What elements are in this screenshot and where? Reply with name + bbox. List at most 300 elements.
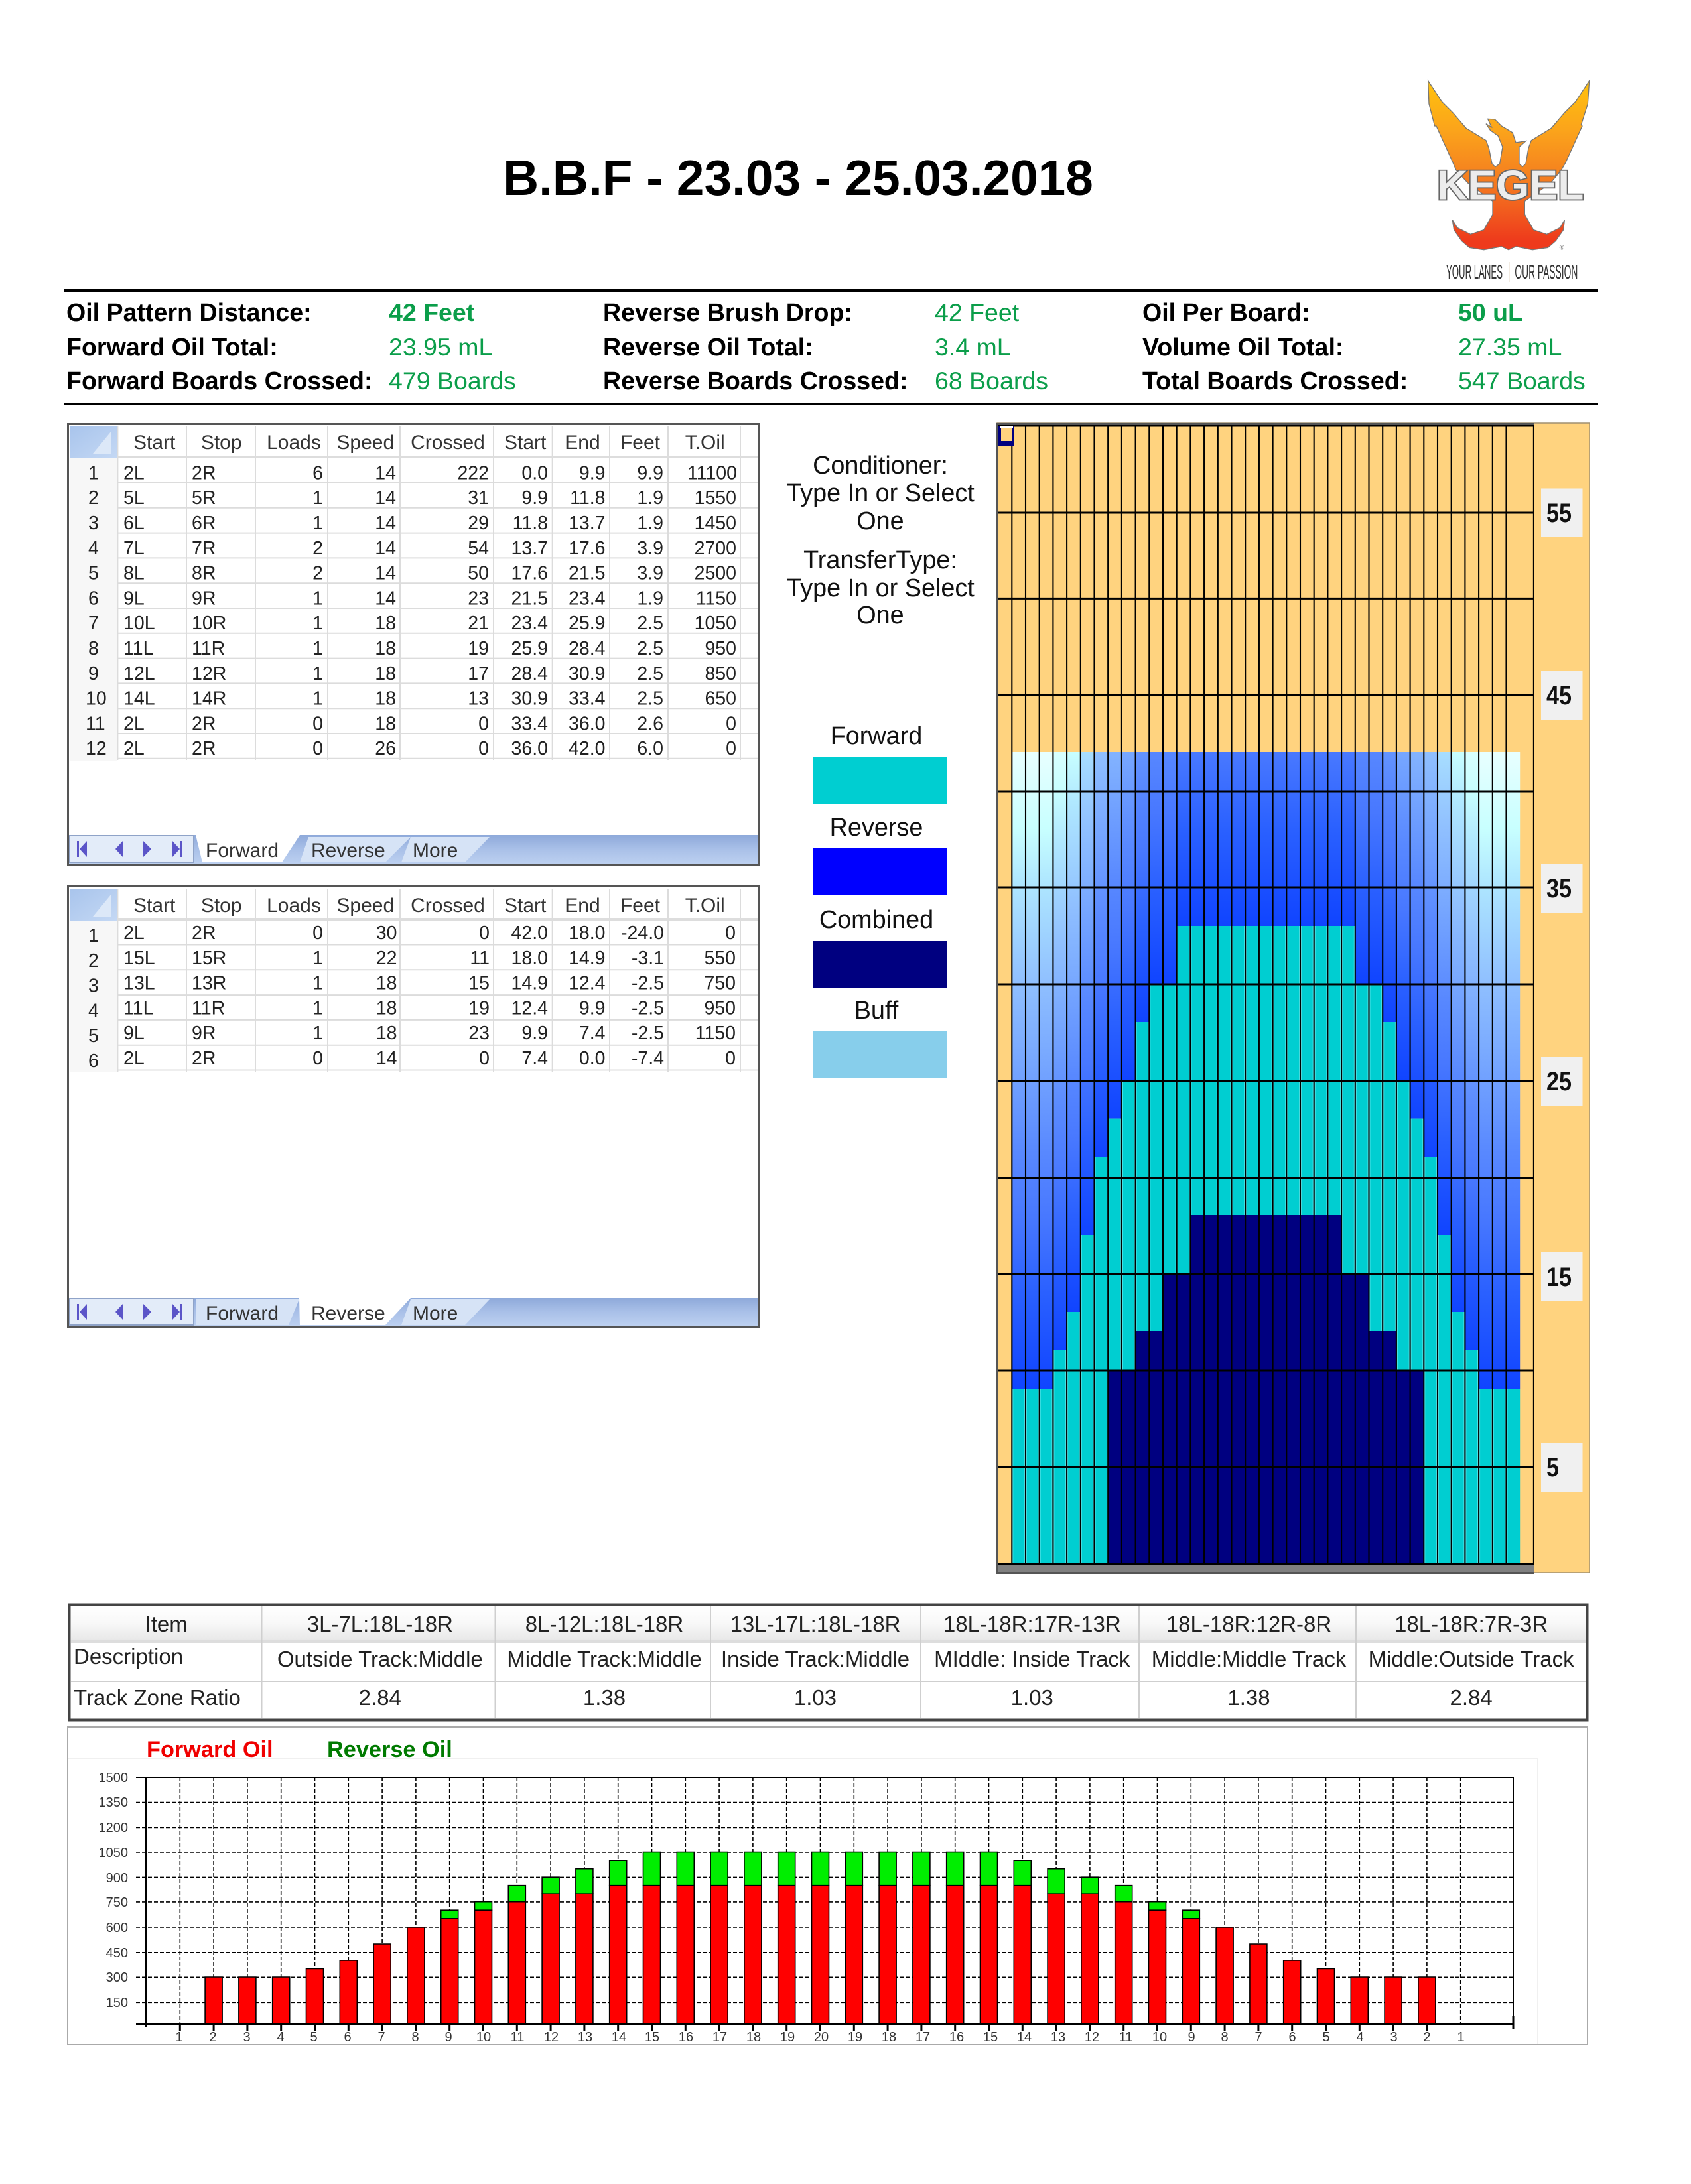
table data rows: 1 [312,588,323,609]
table data rows: 30.9 [569,663,605,684]
table data rows: 7 [88,613,99,634]
table row: description: Description [74,1644,183,1669]
table data rows: 18 [376,973,397,994]
table data rows [86,462,737,759]
table data rows: 2R [192,738,216,759]
chart axes [136,1777,1514,2031]
table data rows: 2500 [695,563,736,584]
legend item: reverse: Reverse [830,814,923,842]
table data rows: 222 [457,462,489,483]
table data rows: 50 [468,563,489,584]
distance label 45: 45 [1546,681,1572,710]
column: forward stats: Oil Pattern Distance: [66,298,312,326]
table data rows: 7.4 [521,1048,548,1069]
table data rows: 13R [192,973,226,994]
table data rows: 13 [468,688,489,710]
chart y axis labels: 1500 [98,1771,128,1785]
table data rows: 2R [192,923,216,944]
table data rows: 9R [192,1023,216,1044]
table data rows: 1 [88,925,99,946]
legend item: buff: Buff [854,997,899,1025]
table row: track zone ratio [74,1685,1493,1710]
summary rule top [64,289,1598,292]
column: total stats: Oil Per Board: [1142,298,1310,326]
sheet tab bar: Reverse [311,1303,385,1324]
table row: description: Middle:Middle Track [1152,1647,1347,1671]
table data rows: 21 [468,613,489,634]
table data rows: 1550 [695,487,736,509]
table data rows: 0.0 [521,462,548,483]
column: forward stats: 23.95 mL [389,333,492,361]
table data rows: 22 [376,948,397,969]
table data rows: 1 [88,462,99,483]
chart x axis labels: 13 [1051,2030,1065,2045]
column: forward stats: 42 Feet [389,298,475,326]
distance labels [1541,488,1583,1492]
column: total stats: Volume Oil Total: [1142,333,1343,361]
table data rows: 0 [478,738,489,759]
table data rows: 1.9 [637,513,663,534]
chart x axis labels: 2 [209,2030,217,2045]
column: reverse stats: Reverse Brush Drop: [603,298,852,326]
table data rows: 2 [312,538,323,559]
column: forward stats: 479 Boards [389,367,516,395]
table data rows: 13.7 [511,538,548,559]
table data rows: 23 [468,588,489,609]
chart x axis labels: 7 [377,2030,385,2045]
table data rows: 1 [312,688,323,710]
text: transfer type selection [786,546,975,629]
text: transfer type selection: TransferType: [803,546,957,574]
table data rows: 0 [312,1048,323,1069]
table row: item: 18L-18R:7R-3R [1394,1612,1548,1636]
table data rows: 1 [312,513,323,534]
table header row: End [565,432,600,454]
table data rows: 12.4 [569,973,606,994]
table data rows: 18 [376,997,397,1019]
table data rows: 650 [705,688,736,710]
table header row: Start [133,432,176,454]
table data rows: 2R [192,462,216,483]
table row: item: 18L-18R:12R-8R [1166,1612,1331,1636]
table row: description: MIddle: Inside Track [934,1647,1130,1671]
table data rows: 2.5 [637,688,663,710]
table row: item: 3L-7L:18L-18R [307,1612,453,1636]
table header row: T.Oil [685,432,725,454]
chart x axis labels: 16 [679,2030,693,2045]
table data rows: 9.9 [521,1023,548,1044]
chart y axis labels: 300 [106,1970,128,1985]
table data rows: 17.6 [511,563,548,584]
chart x axis labels: 14 [1017,2030,1032,2045]
forward oil area [1012,926,1521,1563]
table data rows: 6L [123,513,145,534]
table data rows: 0 [725,923,736,944]
table header row: Crossed [411,432,485,454]
distance label 55: 55 [1546,499,1572,528]
table data rows: 26 [375,738,396,759]
table row: item: 13L-17L:18L-18R [730,1612,900,1636]
table data rows: 14.9 [569,948,605,969]
table data rows: 14 [376,1048,397,1069]
legend item: combined [813,906,947,988]
table data rows: 42.0 [569,738,605,759]
table row: item [145,1612,1548,1636]
panel: reverse load table [68,886,759,1326]
logo registered mark: ® [1560,245,1565,252]
table data rows: 14 [375,487,396,509]
table data rows: 7L [123,538,145,559]
column: reverse stats: 42 Feet [935,298,1020,326]
chart x axis labels [175,2030,1465,2045]
table data rows: 33.4 [511,713,548,734]
chart x axis labels: 6 [344,2030,352,2045]
legend item: combined: Combined [819,906,933,934]
chart x axis labels: 17 [712,2030,727,2045]
table data rows: 36.0 [511,738,548,759]
table data rows: 21.5 [569,563,605,584]
table data rows: 11.8 [570,487,605,509]
table row: description: Middle Track:Middle [507,1647,702,1671]
table data rows: -3.1 [632,948,664,969]
table header row: Loads [267,432,321,454]
lane bottom edge [998,1563,1534,1573]
table data rows: 6 [88,1051,99,1072]
table header row [133,432,725,454]
chart x axis labels: 19 [848,2030,862,2045]
table data rows: 0 [726,713,736,734]
distance label 5 [1541,1443,1583,1492]
table data rows: 0 [312,923,323,944]
table data rows: 33.4 [569,688,606,710]
table data rows: 18 [375,613,396,634]
table data rows: 1.9 [637,588,663,609]
table data rows: 11R [192,997,225,1019]
table data rows: 14 [375,588,396,609]
title: B.B.F - 23.03 - 25.03.2018 [503,150,1093,206]
table row: description: Outside Track:Middle [277,1647,483,1671]
table data rows: 18 [375,713,396,734]
table data rows: 11.8 [513,513,548,534]
chart x axis labels: 11 [1119,2030,1132,2045]
legend item: buff [813,997,947,1078]
panel: lane oil graph [997,423,1590,1573]
table data rows: 23.4 [511,613,548,634]
legend: oil colours [813,722,947,1078]
table data rows: 5 [88,1025,99,1047]
table header row: Start [504,895,547,917]
table header row: T.Oil [685,895,725,917]
table header row: Stop [201,895,242,917]
table row: track zone ratio: Track Zone Ratio [74,1685,241,1710]
table data rows: 9.9 [579,997,605,1019]
chart x axis labels: 9 [444,2030,452,2045]
table data rows: 4 [88,1000,99,1021]
legend item: reverse [813,814,947,895]
table data rows: 10L [123,613,155,634]
chart legend: reverse oil: Reverse Oil [327,1737,452,1762]
chart y axis labels: 150 [106,1996,128,2010]
table data rows: 21.5 [511,588,548,609]
table data rows: 1150 [695,1023,736,1044]
table data rows: 12L [123,663,155,684]
table header row: Stop [201,432,242,454]
logo: Kegel phoenix: OUR PASSION [1515,261,1578,283]
table data rows: 2L [123,1048,145,1069]
column: forward stats: Forward Oil Total: [66,333,278,361]
table row: item: 18L-18R:17R-13R [943,1612,1121,1636]
table header row: Start [133,895,176,917]
table data rows: 2 [312,563,323,584]
table data rows: 9.9 [521,487,548,509]
table header row: End [565,895,600,917]
table header row: Feet [620,895,661,917]
table data rows: 9L [123,1023,145,1044]
chart x axis labels: 2 [1423,2030,1431,2045]
table data rows: 4 [88,538,99,559]
table data rows: 750 [704,973,736,994]
chart x axis labels: 3 [243,2030,251,2045]
table row: description: Middle:Outside Track [1369,1647,1574,1671]
table data rows: 15R [192,948,226,969]
table row: track zone ratio: 1.38 [1227,1685,1270,1710]
chart x axis labels: 6 [1288,2030,1296,2045]
table data rows: 17 [468,663,489,684]
table data rows: -2.5 [632,997,664,1019]
table data rows: 18 [375,638,396,659]
text: conditioner selection: Type In or Select [786,480,975,507]
table data rows: 18 [375,688,396,710]
table data rows: 28.4 [511,663,548,684]
chart x axis labels: 5 [1322,2030,1330,2045]
table data rows: 2L [123,462,145,483]
table data rows: 0.0 [579,1048,605,1069]
chart x axis labels: 12 [544,2030,559,2045]
table data rows: 25.9 [511,638,548,659]
chart x axis labels: 18 [746,2030,761,2045]
text: conditioner selection [786,452,975,535]
table data rows: 6 [88,588,99,609]
table data rows: 0 [312,738,323,759]
table data rows: 14 [375,462,396,483]
table data rows: -7.4 [632,1048,664,1069]
chart y axis labels: 1050 [98,1846,128,1860]
distance label 35: 35 [1546,874,1572,903]
table data rows: 12R [192,663,226,684]
column: reverse stats: 3.4 mL [935,333,1011,361]
table data rows: 6.0 [637,738,663,759]
table row: item: Item [145,1612,188,1636]
chart bars: reverse oil [441,1852,1199,1919]
sheet tab bar: Forward [206,840,279,862]
table data rows: 2R [192,1048,216,1069]
table data rows: 7.4 [579,1023,606,1044]
table data rows: 950 [705,638,736,659]
summary statistics [66,298,1586,395]
panel: forward load table [68,424,759,865]
chart x axis labels: 4 [1356,2030,1364,2045]
chart x axis labels: 17 [915,2030,930,2045]
sheet tab bar [69,1298,758,1326]
chart x axis labels: 7 [1254,2030,1262,2045]
chart x axis labels: 12 [1085,2030,1099,2045]
distance label 25: 25 [1546,1067,1572,1096]
table data rows: 1 [312,997,323,1019]
column: reverse stats: Reverse Boards Crossed: [603,367,908,395]
sheet tab bar: More [413,840,458,862]
chart y axis labels [98,1771,128,2010]
column: total stats: 547 Boards [1458,367,1586,395]
table header row [133,895,725,917]
oil ramp: reverse and buffed oil columns [1012,752,1520,1389]
chart x axis labels: 3 [1390,2030,1398,2045]
table data rows: 54 [468,538,489,559]
chart y axis labels: 1200 [98,1821,128,1835]
column: total stats: Total Boards Crossed: [1142,367,1408,395]
table data rows: 18.0 [511,948,548,969]
chart x axis labels: 8 [1221,2030,1229,2045]
distance label 25 [1541,1057,1583,1106]
table data rows: 11 [86,713,105,734]
table data rows: 12.4 [511,997,548,1019]
table data rows: 0 [725,1048,736,1069]
table data rows: 12 [86,738,107,759]
table data rows: 5R [192,487,216,509]
table data rows: 5 [88,563,99,584]
table corner cell [70,889,117,921]
table data rows: 2L [123,923,145,944]
chart x axis labels: 14 [612,2030,626,2045]
distance label 45 [1541,671,1583,720]
distance label 5: 5 [1546,1453,1559,1482]
table data rows: 2R [192,713,216,734]
chart y axis labels: 750 [106,1895,128,1910]
chart bars: forward oil [205,1886,1436,2024]
legend item: forward [813,722,947,804]
table data rows: 2 [88,487,99,509]
table data rows [88,923,736,1072]
table data rows: 10 [86,688,107,710]
table data rows: 850 [705,663,736,684]
table data rows: 11100 [687,462,737,483]
table data rows: 3 [88,976,99,997]
table data rows: 2700 [695,538,736,559]
table data rows: 2L [123,713,145,734]
chart x axis labels: 11 [511,2030,524,2045]
table data rows: 9 [88,663,99,684]
table data rows: 1.9 [637,487,663,509]
table data rows: 13L [123,973,155,994]
chart y axis labels: 450 [106,1946,128,1960]
table data rows: 36.0 [569,713,605,734]
table data rows: 6R [192,513,216,534]
table data rows: 19 [468,638,489,659]
chart y axis labels: 600 [106,1921,128,1935]
chart x axis labels: 20 [814,2030,829,2045]
column: total stats [1142,298,1586,395]
table header row: Crossed [411,895,485,917]
table data rows: 25.9 [569,613,605,634]
table data rows: 1450 [695,513,736,534]
table data rows: 1050 [695,613,736,634]
column: total stats: 50 uL [1458,298,1523,326]
distance label 35 [1541,864,1583,913]
table data rows: 1 [312,973,323,994]
chart legend: forward oil: Forward Oil [147,1737,273,1762]
distance label 15 [1541,1252,1583,1301]
table data rows: 2.5 [637,663,663,684]
table data rows: 9R [192,588,216,609]
chart x axis labels: 15 [983,2030,998,2045]
chart x axis labels: 1 [1457,2030,1465,2045]
table data rows: 550 [704,948,736,969]
panel: track zone ratio table [69,1605,1587,1720]
distance label 55 [1541,488,1583,537]
combined oil area [1108,1215,1424,1563]
chart x axis labels: 19 [780,2030,795,2045]
table data rows: 14R [192,688,226,710]
table data rows: 18 [375,663,396,684]
table data rows: 1 [312,638,323,659]
text: transfer type selection: Type In or Select [786,574,975,602]
chart y axis labels: 1350 [98,1795,128,1810]
legend item: forward: Forward [831,722,922,750]
table header row: Start [504,432,547,454]
lane frame [998,424,1534,1573]
lane marker [998,426,1014,446]
table row: track zone ratio: 2.84 [359,1685,401,1710]
table row: track zone ratio: 1.38 [583,1685,626,1710]
chart x axis labels: 18 [882,2030,896,2045]
table data rows: 1 [312,663,323,684]
table data rows: 29 [468,513,489,534]
text: conditioner selection: Conditioner: [813,452,948,480]
sheet tab bar: Forward [206,1303,279,1324]
table data rows: 6 [312,462,323,483]
chart x axis labels: 5 [310,2030,318,2045]
table data rows: 28.4 [569,638,606,659]
column: total stats: 27.35 mL [1458,333,1562,361]
table data rows: 8 [88,638,99,659]
table data rows: 15 [468,973,490,994]
chart x axis labels: 16 [949,2030,964,2045]
table row: track zone ratio: 1.03 [1011,1685,1053,1710]
table data rows: 30.9 [511,688,548,710]
table data rows: 31 [468,487,489,509]
table data rows: 9.9 [579,462,605,483]
table row: track zone ratio: 2.84 [1450,1685,1493,1710]
table data rows: 30 [376,923,397,944]
column: forward stats [66,298,516,395]
table data rows: 3.9 [637,538,663,559]
table data rows: 23 [468,1023,490,1044]
table data rows: 11 [470,948,490,969]
sheet tab bar: Reverse [311,840,385,862]
table data rows: 2.5 [637,613,663,634]
table data rows: -2.5 [632,973,664,994]
table data rows: 10R [192,613,226,634]
lane background [997,423,1590,1573]
table data rows: 15L [123,948,155,969]
column: forward stats: Forward Boards Crossed: [66,367,372,395]
panel: oil per board chart [68,1727,1588,2045]
table data rows: 3 [88,513,99,534]
table data rows: 14 [375,563,396,584]
table corner cell [70,426,117,458]
table data rows: 0 [726,738,736,759]
chart x axis labels: 10 [1152,2030,1167,2045]
table data rows: 2 [88,950,99,972]
